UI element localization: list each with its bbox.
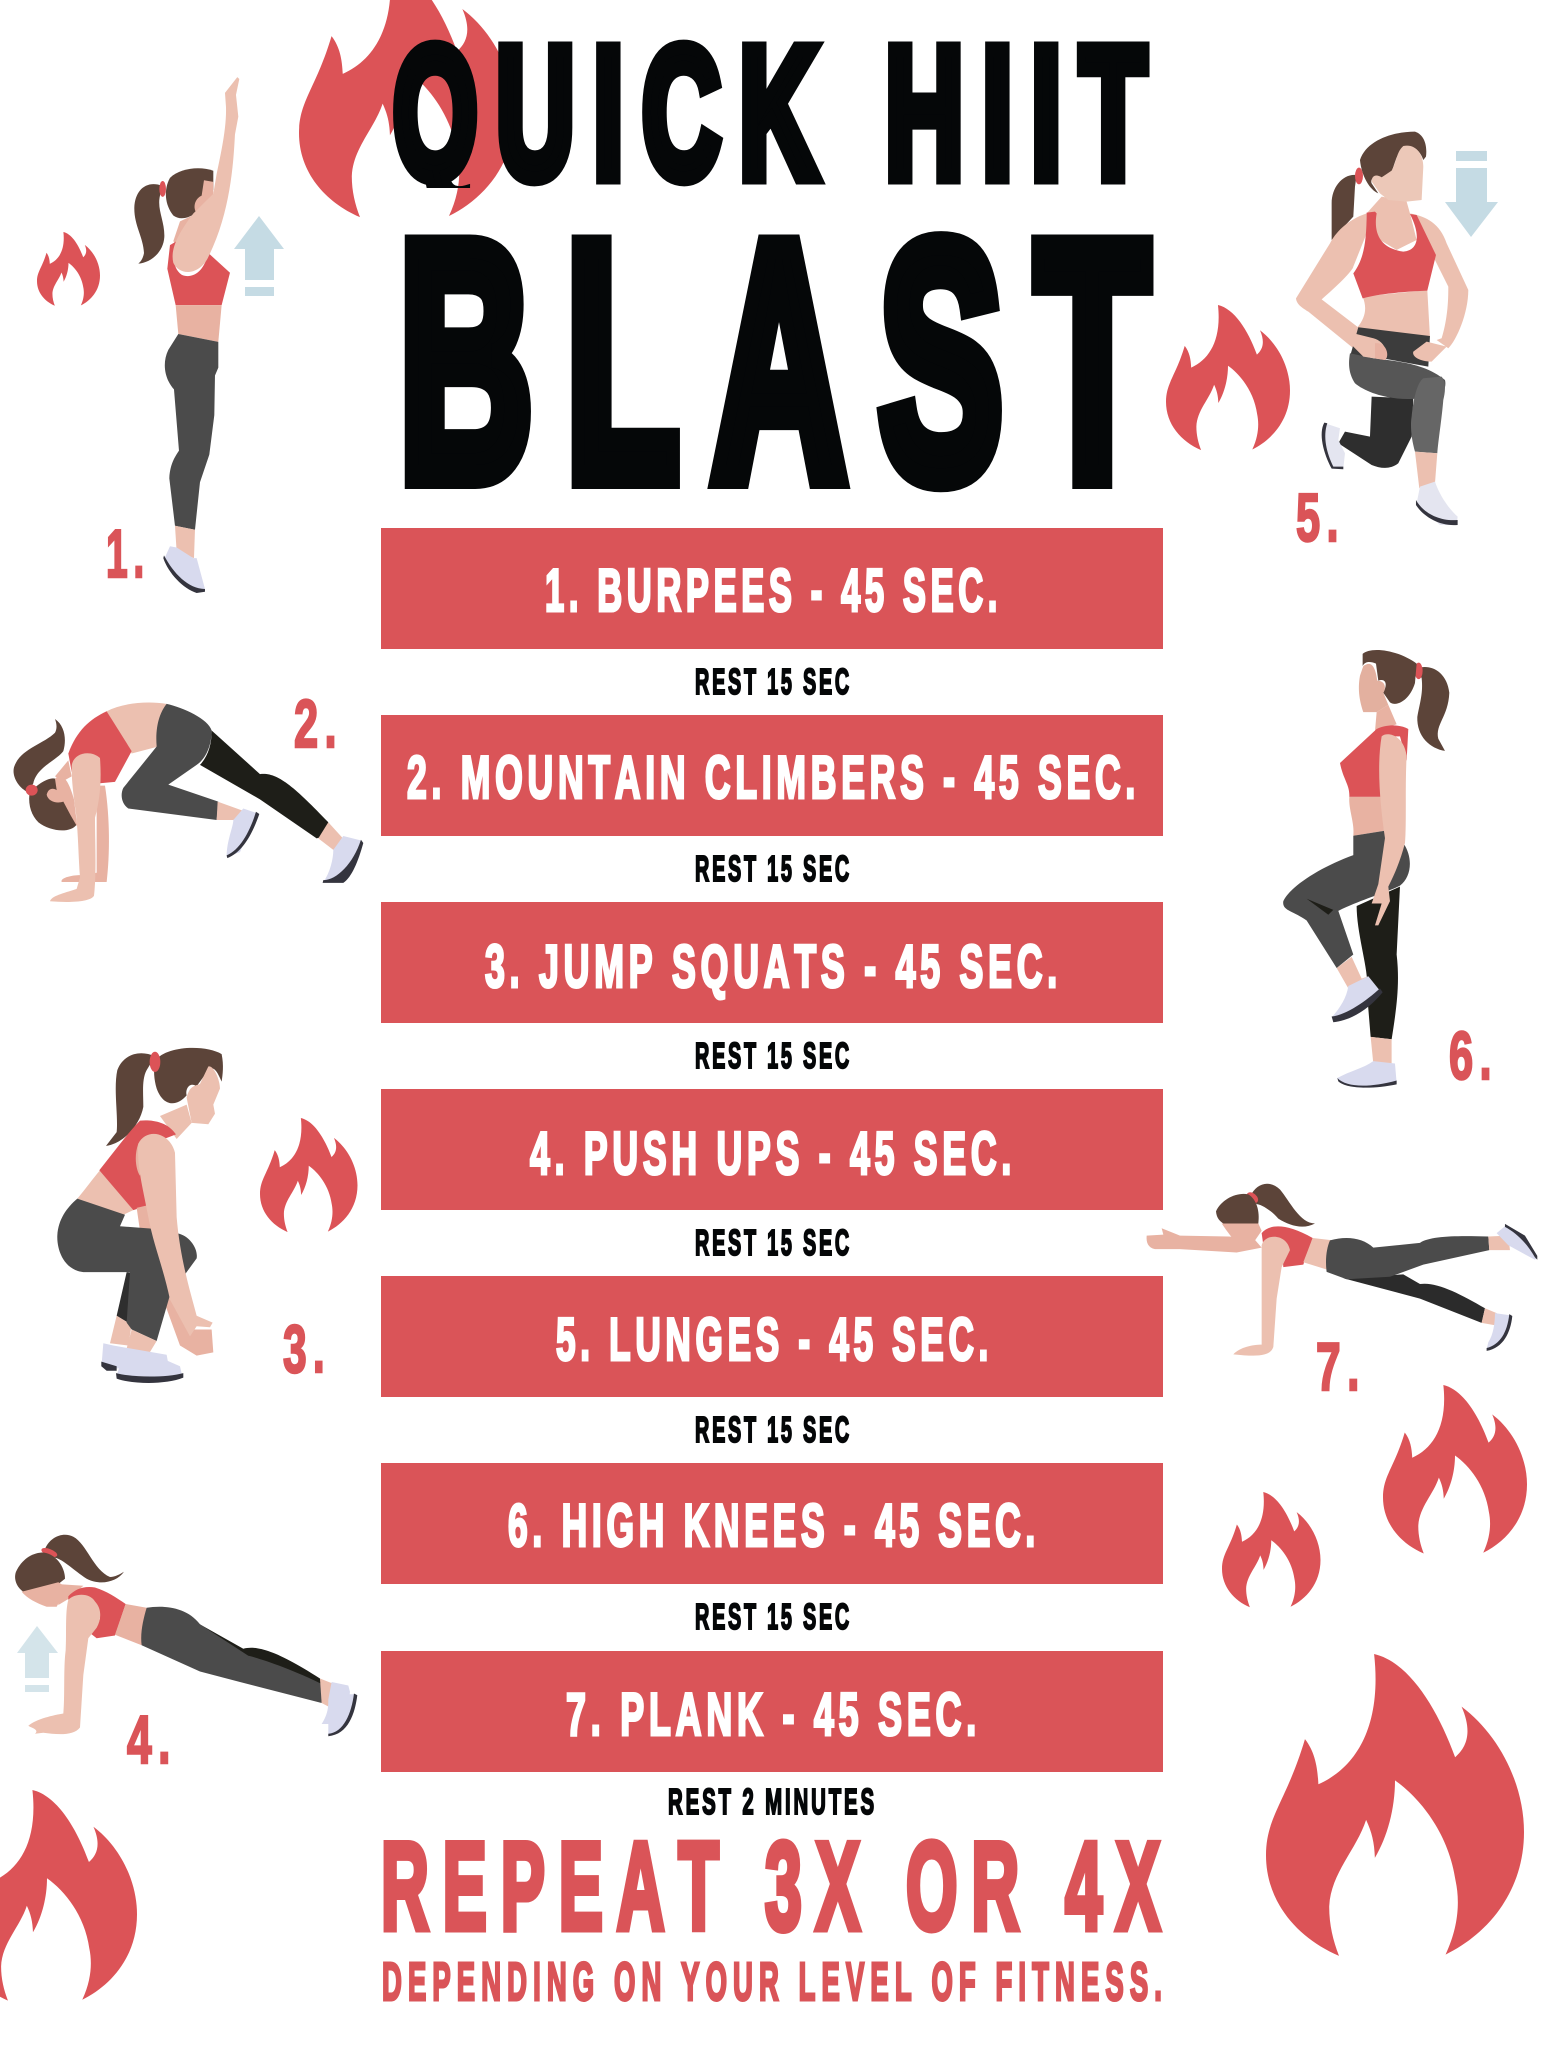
icon: flame right middle: [1383, 1385, 1527, 1553]
figure 7: plank with raised arm: [1147, 1184, 1537, 1356]
number 3: 3.: [283, 1311, 331, 1387]
bar: mountain climbers: [381, 715, 1163, 836]
bar: burpees: [381, 528, 1163, 649]
bar: lunges: 5. LUNGES - 45 SEC.: [556, 1306, 993, 1373]
rest label 4: REST 15 SEC: [695, 1222, 852, 1263]
rest label 3: REST 15 SEC: [695, 1035, 852, 1076]
bar: plank: [381, 1651, 1163, 1772]
bar: push ups: [381, 1089, 1163, 1210]
bar: lunges: [381, 1276, 1163, 1397]
icon: flame bottom left: [0, 1790, 137, 2001]
arrow: up beside figure 4: [17, 1626, 58, 1692]
icon: small flame top left: [37, 232, 100, 306]
panel: exercise list: [381, 528, 1163, 1772]
figure 2: mountain climber: [14, 702, 363, 902]
icon: flame beside figure 3: [260, 1118, 358, 1232]
rest label 2: REST 15 SEC: [695, 848, 852, 889]
bar: push ups: 4. PUSH UPS - 45 SEC.: [530, 1120, 1016, 1187]
figure 5: lunge: [1296, 132, 1468, 525]
number 5: 5.: [1296, 480, 1345, 556]
rest label 5: REST 15 SEC: [695, 1409, 852, 1450]
number 4: 4.: [127, 1702, 177, 1778]
arrow: up beside figure 1: [234, 216, 284, 296]
figure 4: push up: [15, 1535, 357, 1736]
number 2: 2.: [294, 686, 343, 762]
icon: large flame behind title: [299, 0, 514, 217]
rest label 6: REST 15 SEC: [695, 1596, 852, 1637]
rest 2 minutes: REST 2 MINUTES: [668, 1781, 877, 1822]
number 7: 7.: [1316, 1329, 1366, 1405]
figure 1: jump reach: [134, 77, 239, 593]
bar: high knees: 6. HIGH KNEES - 45 SEC.: [508, 1492, 1040, 1559]
bar: high knees: [381, 1463, 1163, 1584]
bar: plank: 7. PLANK - 45 SEC.: [566, 1681, 981, 1748]
number 6: 6.: [1449, 1018, 1498, 1094]
icon: flame bottom right large: [1266, 1654, 1524, 1956]
icon: flame right small: [1222, 1492, 1320, 1607]
rest label 1: REST 15 SEC: [695, 661, 852, 702]
figure 6: high knee: [1283, 650, 1449, 1088]
bar: burpees: 1. BURPEES - 45 SEC.: [545, 557, 1002, 624]
figure 3: jump squat: [57, 1048, 223, 1383]
bar: jump squats: 3. JUMP SQUATS - 45 SEC.: [485, 933, 1062, 1000]
number 1: 1.: [106, 516, 150, 592]
icon: flame beside figure 5: [1166, 305, 1290, 450]
bar: jump squats: [381, 902, 1163, 1023]
arrow: down beside figure 5: [1445, 151, 1498, 237]
